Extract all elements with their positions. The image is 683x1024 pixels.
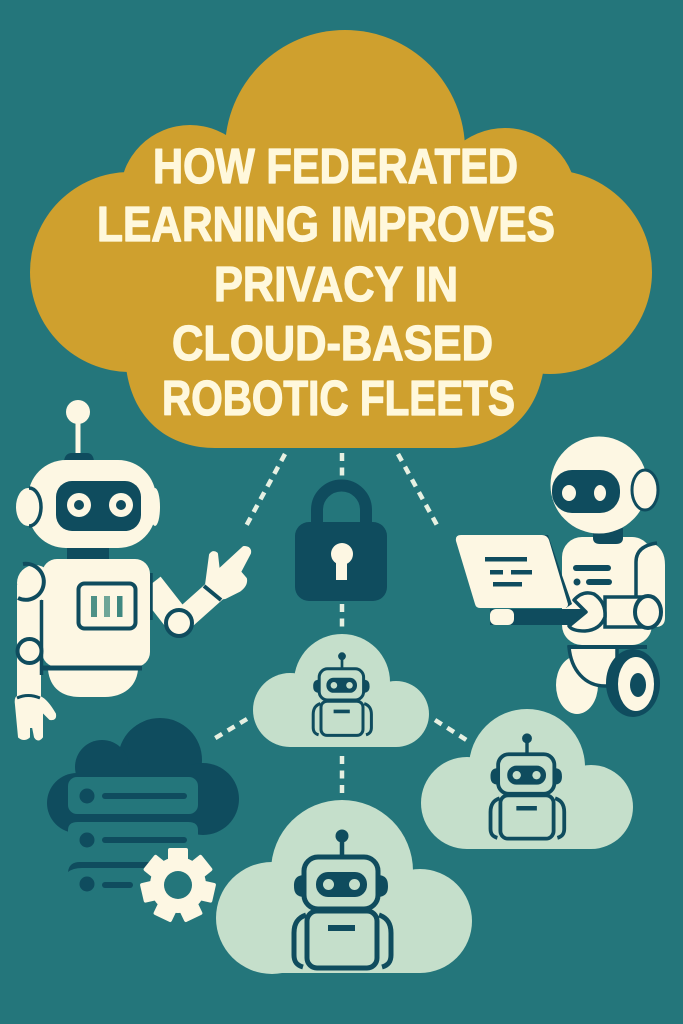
head — [16, 460, 160, 548]
dark cloud — [47, 718, 239, 835]
right arm — [150, 548, 249, 636]
laptop — [456, 535, 586, 625]
torso — [562, 537, 652, 645]
laptop text lines — [485, 557, 532, 586]
server rows — [68, 777, 198, 814]
title: CLOUD-BASED — [172, 317, 493, 371]
left arm — [16, 564, 55, 740]
robot icon — [491, 733, 564, 839]
chest lines — [573, 565, 612, 586]
torso — [42, 559, 150, 667]
leg — [556, 656, 598, 714]
head — [550, 436, 658, 534]
main gold cloud — [30, 30, 652, 448]
antenna — [64, 400, 94, 461]
robot icon — [313, 652, 371, 735]
cloud: bottom with robot — [216, 800, 472, 974]
title: PRIVACY IN — [214, 258, 458, 312]
upper arm — [635, 543, 665, 628]
dashed connectors — [212, 453, 468, 796]
title — [97, 140, 555, 426]
neck — [67, 546, 109, 562]
wheel — [606, 649, 660, 717]
cloud: middle with robot — [253, 634, 429, 747]
neck — [593, 528, 623, 544]
icon: padlock — [295, 486, 387, 601]
chest panel — [78, 584, 136, 628]
title: ROBOTIC FLEETS — [162, 372, 515, 426]
robot icon — [294, 830, 391, 968]
forearm and hand — [569, 593, 661, 631]
hip — [569, 647, 617, 686]
robot: left pointing — [16, 400, 249, 740]
cloud server with gear — [40, 718, 239, 923]
icon: gear — [140, 848, 216, 923]
hip — [48, 670, 138, 697]
robot: right with laptop — [456, 436, 665, 717]
title: LEARNING IMPROVES — [97, 198, 555, 252]
cloud: right with robot — [421, 709, 633, 849]
title: HOW FEDERATED — [153, 140, 518, 194]
